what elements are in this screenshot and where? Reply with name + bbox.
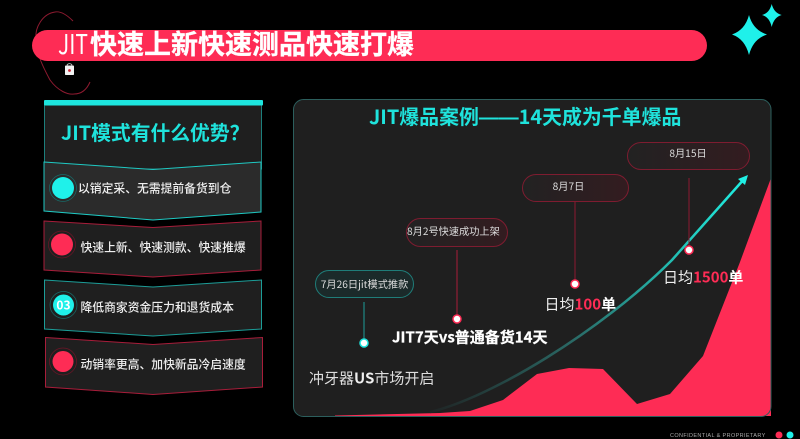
growth curve arrow (430, 175, 748, 412)
footer: CONFIDENTIAL & PROPRIETARY (670, 433, 766, 439)
chart title: JIT爆品案例——14天成为千单爆品 (369, 101, 681, 130)
icon: small sparkle (762, 4, 782, 27)
label: market launch: 冲牙器US市场开启 (309, 368, 434, 388)
label: daily 1500: 日均1500单 (663, 266, 743, 288)
item 2: 快速上新、快速测款、快速推爆 (80, 238, 246, 255)
footer (670, 432, 794, 439)
item 4 (46, 338, 262, 394)
panel header box (44, 103, 262, 169)
milestone: 8月7日 (522, 174, 628, 288)
item 3: 降低商家资金压力和退货成本 (80, 298, 234, 316)
milestone: 7月26日: 7月26日jit模式推款 (321, 276, 408, 291)
panel: advantages (44, 100, 263, 394)
icon: large sparkle (732, 15, 767, 55)
item 1 (44, 162, 261, 220)
label: daily 100: 日均100单 (544, 294, 616, 314)
decorative arc around title (36, 12, 90, 94)
label: JIT 7 days vs 14 days: JIT7天vs普通备货14天 (392, 326, 547, 348)
item 4: 动销率更高、加快新品冷启速度 (80, 356, 246, 372)
title bar (32, 23, 707, 62)
title text: JIT (58, 23, 88, 62)
panel top bar (44, 100, 263, 106)
milestone: 8月2号 (406, 218, 508, 323)
milestone: 8月2号: 8月2号快速成功上架 (407, 223, 500, 238)
area chart (335, 178, 771, 416)
panel: JIT case chart (294, 100, 771, 416)
milestone: 8月15日 (628, 142, 750, 254)
milestone: 8月7日: 8月7日 (553, 178, 584, 193)
milestone: 8月15日: 8月15日 (669, 145, 707, 160)
title text: 快速上新快速测品快速打爆 (90, 23, 414, 62)
item 2 (44, 221, 261, 277)
item 3 (44, 280, 262, 336)
milestone: 7月26日 (316, 270, 414, 347)
item 1: 以销定采、无需提前备货到仓 (78, 180, 232, 196)
panel heading: JIT模式有什么优势？ (61, 117, 249, 146)
item 3: 03 (56, 296, 71, 314)
icon: shopping bag (65, 64, 74, 75)
